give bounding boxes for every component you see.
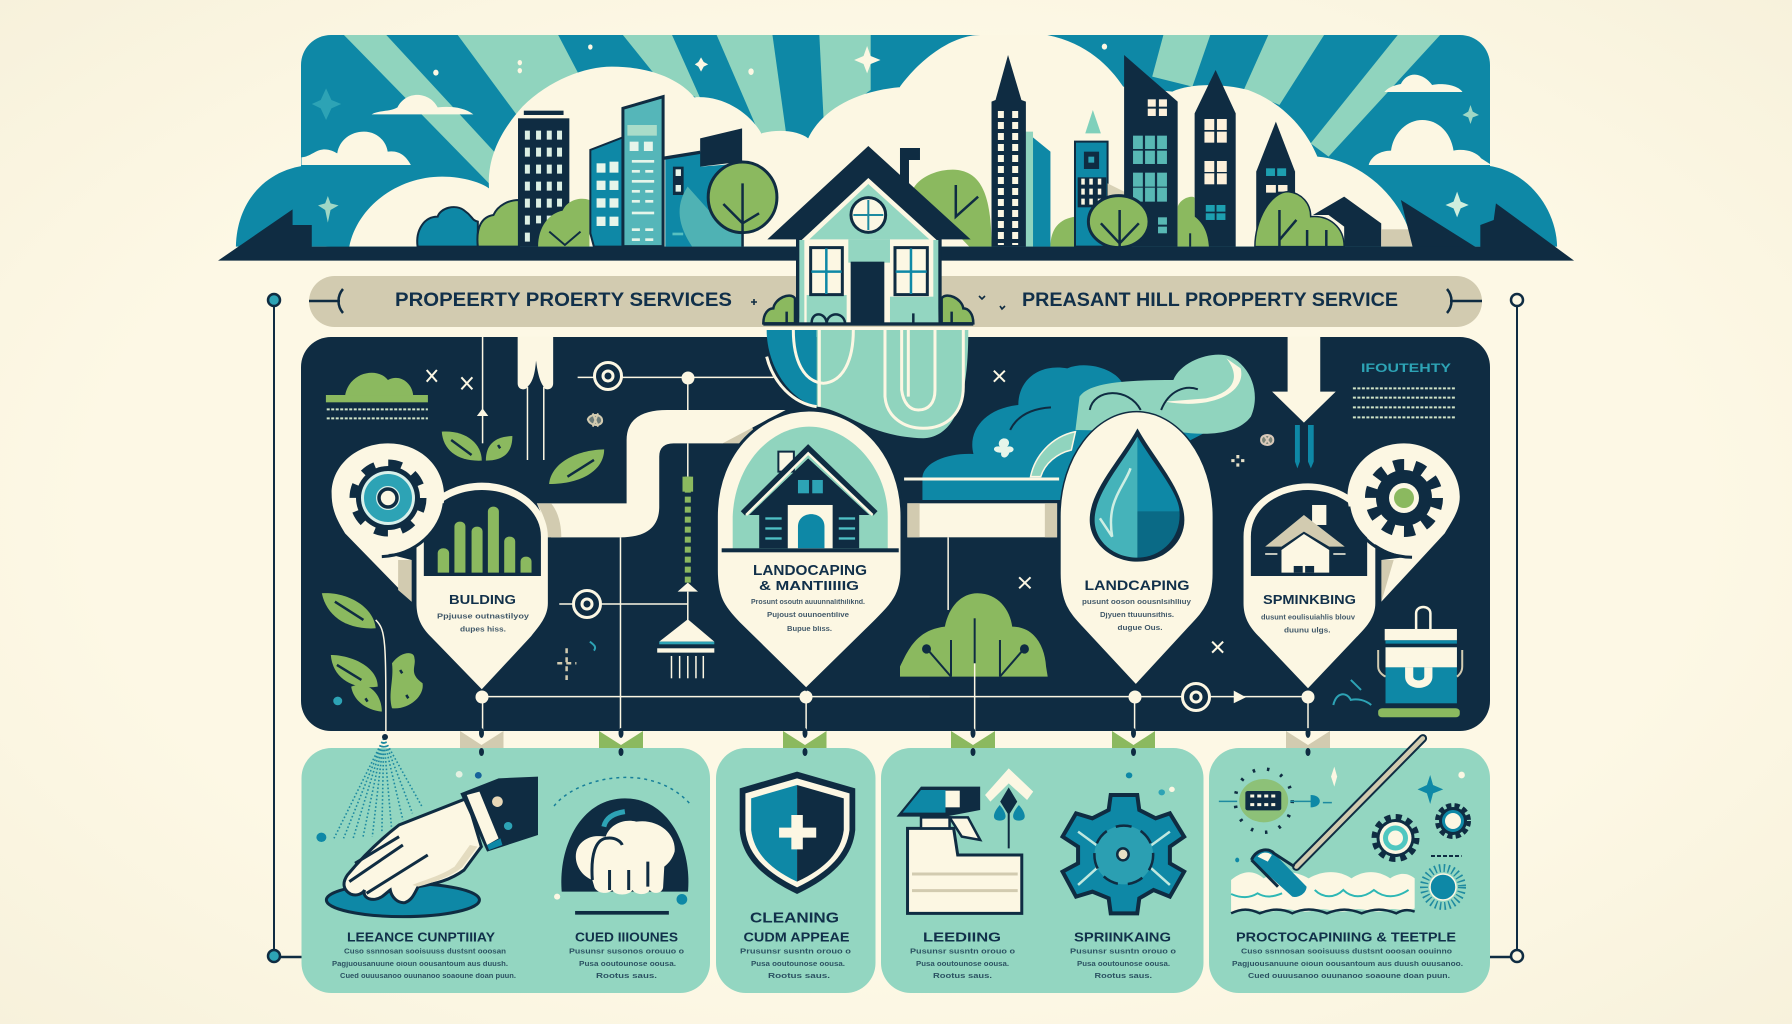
card text left: Cuso ssnnosan sooisuuss dustsnt ooosan	[344, 948, 506, 956]
card text right: Pusunsr susonos orouuo o	[569, 948, 684, 956]
balloon tan edge	[1381, 560, 1394, 602]
pin body	[716, 410, 902, 689]
label: top right panel heading: IFOUTEHTY	[1361, 361, 1451, 375]
left bush	[763, 296, 795, 323]
left map details	[326, 337, 930, 732]
sun rays left	[344, 35, 871, 183]
roof	[767, 146, 971, 323]
card text right: Rootus saus.	[596, 973, 657, 980]
left window	[811, 248, 842, 295]
round window mullions	[853, 200, 883, 230]
ground band with mountains right	[900, 203, 1574, 261]
pin body	[1244, 483, 1375, 688]
card text right: Pusa ooutounose oousa.	[579, 961, 676, 968]
card text right	[1070, 948, 1176, 980]
icon: house in dome	[722, 427, 899, 552]
pin blurb: pusunt ooson oousnlsihlliuy	[1082, 599, 1191, 606]
balloon tan edge	[398, 560, 412, 602]
banner left ornament	[309, 289, 343, 313]
round window	[851, 198, 886, 232]
card title right: SPRIINKAING	[1074, 930, 1171, 944]
base strip	[763, 322, 973, 326]
door	[851, 262, 884, 323]
card text right: Pusunsr susntn orouo o	[1070, 948, 1176, 956]
right map details	[900, 337, 1456, 732]
card title left: LEEANCE CUNPTIIIAY	[347, 930, 495, 944]
icon: mop and waves	[1231, 738, 1423, 913]
card text: Prusunsr susntn orouo o	[740, 948, 851, 956]
card text left: Pagjuousanuune oioun oousantoum aus duush.	[332, 961, 508, 968]
card text left: Rootus saus.	[933, 973, 992, 980]
banner right ornament	[1447, 289, 1482, 313]
right bush	[942, 296, 973, 323]
card text: Pusa ooutounose oousa.	[751, 961, 845, 968]
dome with bar chart	[424, 490, 541, 576]
heading right: PREASANT HILL PROPPERTY SERVICE	[1022, 290, 1398, 311]
card text left: Pusunsr susntn orouo o	[910, 948, 1015, 956]
pin subtitle: & MANTIIIIIG	[759, 578, 859, 593]
pin blurb line: Djyuen ttuuunsithis.	[1100, 612, 1174, 619]
big cream cloud right	[900, 35, 1413, 247]
pin blurb line: duunu ulgs.	[1284, 628, 1331, 634]
card text	[1232, 948, 1463, 980]
icon: hand on puddle	[316, 771, 538, 917]
sky panel	[301, 35, 1490, 247]
panel: bottom card one	[302, 738, 710, 993]
balloon	[1348, 443, 1460, 602]
pin: gear balloon right	[1348, 443, 1460, 602]
panel: dark process map	[301, 330, 1490, 733]
connector tabs	[460, 731, 1330, 765]
icon: dome with house	[1251, 490, 1367, 576]
card title right: CUED IIIOUNES	[575, 930, 678, 944]
pin title: LANDOCAPING	[753, 562, 867, 579]
pin blurb line: Pujoust ouunoentilive	[767, 612, 849, 619]
frame connector right	[1490, 294, 1523, 962]
dark panel background	[301, 337, 1490, 731]
pin blurb: Prosunt osoutn auuunnalithiliknd.	[751, 599, 865, 606]
icon: gear	[354, 464, 422, 532]
card text: Pagjuousanuune oioun oousantoum aus duush ouusanoo.	[1232, 961, 1463, 968]
card text right	[569, 948, 684, 980]
banner: title pill	[309, 276, 1482, 327]
icon: water drop	[1090, 428, 1184, 562]
pin: sprinkling	[1244, 483, 1375, 688]
leaves	[322, 432, 604, 733]
banner small marks	[751, 296, 1005, 309]
card text: Rootus saus.	[768, 973, 830, 980]
frame connector left	[268, 294, 302, 962]
card text	[740, 948, 851, 980]
card text right: Pusa ooutounose oousa.	[1077, 961, 1170, 968]
panel: bottom card two	[716, 748, 876, 993]
card text left: Pusa ooutounose oousa.	[916, 961, 1009, 968]
pin blurb line: Bupue bliss.	[787, 626, 832, 633]
pin blurb line: dugue Ous.	[1118, 625, 1163, 632]
pin blurb: dusunt eoulisuiahlis blouv	[1261, 614, 1355, 622]
house: central property	[763, 146, 973, 326]
panel: bottom card three	[881, 748, 1204, 993]
pin body	[1060, 412, 1213, 685]
card background	[1209, 748, 1490, 993]
icon: cloud fist	[554, 777, 692, 915]
heading left: PROPEERTY PROERTY SERVICES	[395, 290, 732, 311]
card background	[302, 748, 710, 993]
mint house foundation shape	[767, 330, 968, 438]
icon: teal gear	[1063, 772, 1184, 913]
card text left: Cued ouuusanoo ouunanoo soaoune doan puun.	[340, 973, 516, 980]
card text: Cuso ssnnosan sooisuuss dustsnt ooosan oouinno	[1241, 948, 1452, 956]
balloon	[332, 443, 444, 602]
house body	[799, 178, 938, 323]
big cream cloud left	[349, 67, 910, 247]
card text right: Rootus saus.	[1094, 973, 1152, 980]
pin body	[416, 483, 548, 689]
pin: landscaping and maintaining	[716, 410, 902, 689]
card title left: LEEDIING	[923, 930, 1001, 944]
icon: sun chip	[1219, 767, 1465, 856]
pin blurb: Ppjuuse outnastilyoy	[437, 614, 529, 620]
connector drops over tabs	[382, 728, 1310, 756]
buildings and trees right	[913, 55, 1480, 250]
banner background	[309, 276, 1482, 327]
panel: bottom card four	[1209, 738, 1490, 993]
right window	[895, 248, 927, 295]
target nodes	[476, 362, 1314, 710]
card title: PROCTOCAPINIING & TEETPLE	[1236, 930, 1456, 944]
icon: shield	[740, 772, 855, 894]
base shrub detail	[787, 312, 952, 323]
icon: spray bottle	[897, 768, 1033, 913]
pin title: LANDCAPING	[1084, 577, 1190, 593]
icon: small gears and sun	[1374, 806, 1468, 906]
balloon dark arc	[1349, 507, 1412, 557]
ground band with mountains left	[218, 209, 910, 261]
icon: gear	[1372, 466, 1436, 530]
teal hills and small clouds right	[1102, 44, 1557, 247]
teal hills and small clouds left	[236, 44, 880, 247]
pin: landscaping water	[1060, 412, 1213, 685]
icon: water spray	[334, 738, 422, 838]
balloon dark arc	[382, 503, 444, 557]
chimney	[900, 148, 920, 190]
pin: building	[416, 483, 548, 689]
pin: gear balloon left	[332, 443, 444, 602]
pin title: BULDING	[449, 592, 516, 607]
card background	[881, 748, 1204, 993]
card title line two: CUDM APPEAE	[744, 930, 850, 944]
sun rays right	[1152, 35, 1440, 157]
icon: bucket	[1378, 607, 1462, 717]
card background	[716, 748, 876, 993]
card text: Cued ouuusanoo ouunanoo soaoune doan puun.	[1248, 973, 1450, 980]
card text left	[332, 948, 516, 980]
card title line one: CLEANING	[750, 910, 839, 926]
pin title: SPMINKBING	[1263, 592, 1356, 607]
buildings and trees left	[417, 97, 777, 247]
pin blurb line: dupes hiss.	[460, 626, 506, 634]
scene: sky and city skyline	[218, 35, 1574, 261]
card text left	[910, 948, 1015, 980]
